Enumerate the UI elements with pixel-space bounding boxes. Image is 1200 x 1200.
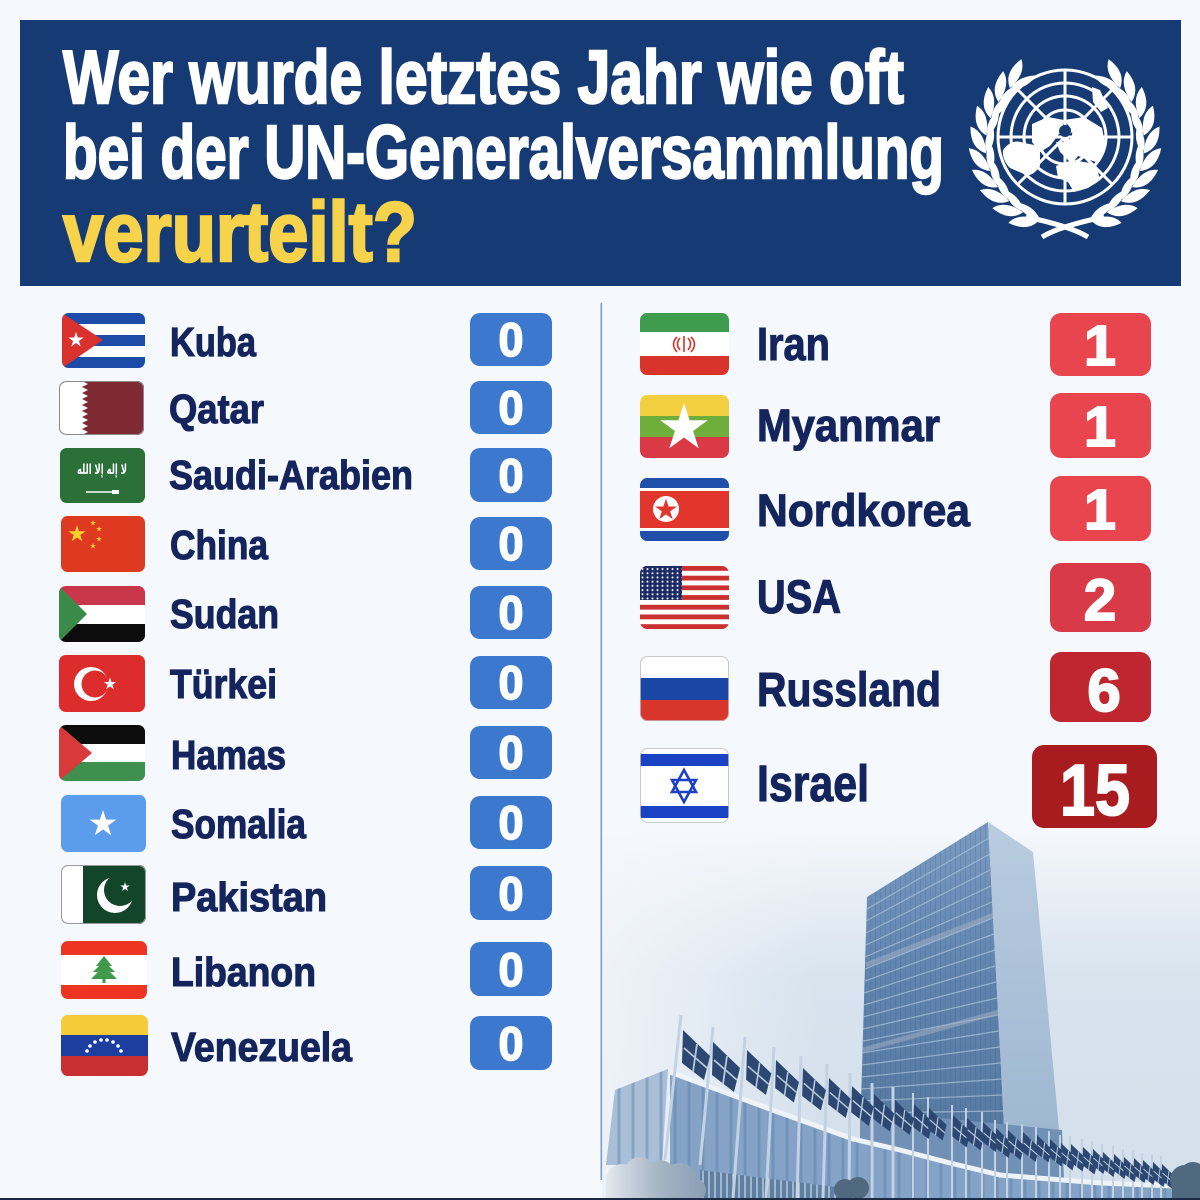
title: white question lines: Wer wurde letztes Jahr wie oft (63, 35, 904, 119)
flag: Libanon (61, 941, 147, 999)
bottom edge strip (0, 1198, 1200, 1200)
flag: Saudi-Arabien (60, 448, 145, 503)
row of flags (682, 1030, 1176, 1189)
count badge: 0 (498, 867, 524, 920)
row: Pakistan (61, 865, 552, 924)
icon: UN emblem (969, 59, 1161, 237)
roof edge (670, 1072, 1175, 1186)
column divider (600, 303, 602, 1180)
flag: Sudan (59, 586, 145, 642)
row: Qatar (59, 381, 552, 435)
name: Pakistan (171, 874, 327, 920)
name: Somalia (171, 801, 307, 847)
flag: Russland (640, 656, 729, 721)
title: white question lines (63, 35, 944, 194)
count badge (470, 517, 552, 570)
count badge: 1 (1084, 314, 1116, 378)
building photo backdrop (602, 822, 1200, 1200)
flag: Israel (640, 748, 729, 823)
right column: condemned states (640, 313, 1157, 831)
fence (700, 1170, 860, 1198)
name: Iran (757, 318, 830, 370)
row: Russland (640, 652, 1151, 724)
count badge (470, 381, 552, 434)
name: Israel (757, 755, 869, 812)
row: Hamas (59, 725, 552, 781)
count badge: 0 (498, 943, 524, 996)
lower glass band behind facade (860, 1110, 1064, 1180)
row: Türkei (59, 655, 552, 712)
flag: Iran (640, 313, 729, 375)
name: USA (757, 570, 841, 623)
flag: Nordkorea (640, 478, 729, 541)
flag: Somalia (61, 795, 146, 852)
name: Saudi-Arabien (169, 452, 413, 498)
count badge (470, 866, 552, 920)
count badge: 0 (498, 449, 524, 502)
count badge: 0 (498, 381, 524, 434)
row: Myanmar (640, 393, 1151, 459)
count badge (470, 942, 552, 996)
count badge (1032, 745, 1157, 831)
name: Türkei (170, 661, 277, 707)
count badge: 1 (1084, 478, 1116, 542)
row: Kuba (62, 313, 552, 368)
count badge (470, 313, 552, 366)
row: Libanon (61, 941, 552, 999)
tower: glass front (860, 822, 1005, 1145)
count badge (1050, 563, 1151, 633)
curved facade (670, 1074, 1175, 1198)
flag: Palästina (59, 725, 145, 781)
title: white question lines: bei der UN-Generalversammlung (63, 110, 944, 194)
count badge: 0 (498, 313, 524, 366)
name: Nordkorea (757, 485, 971, 536)
row: Saudi-Arabien (60, 448, 552, 503)
tower: side wall (988, 822, 1061, 1150)
count badge (1050, 393, 1151, 459)
count badge (470, 448, 552, 502)
title: yellow highlight word: verurteilt? (63, 185, 417, 279)
name: Libanon (171, 949, 316, 995)
flag: Myanmar (640, 395, 729, 458)
count badge: 0 (498, 586, 524, 639)
count badge: 1 (1084, 395, 1116, 459)
count badge (1050, 652, 1151, 724)
row: USA (640, 563, 1151, 633)
flag: USA (640, 566, 729, 629)
flag: China (61, 516, 145, 572)
count badge: 0 (498, 1017, 524, 1070)
flag: Saudi-Arabien: لا إله إلا الله (77, 462, 127, 478)
row: Israel (640, 745, 1157, 831)
count badge (1050, 476, 1151, 542)
count badge: 2 (1084, 568, 1116, 633)
count badge (470, 796, 552, 849)
flag: Venezuela (61, 1015, 148, 1076)
row: Nordkorea (640, 476, 1151, 542)
name: Hamas (171, 732, 286, 778)
count badge (470, 1016, 552, 1070)
name: Russland (757, 664, 941, 717)
name: Qatar (169, 386, 264, 432)
name: Venezuela (171, 1024, 353, 1070)
name: Sudan (170, 591, 279, 637)
count badge: 0 (498, 656, 524, 709)
count badge: 0 (498, 726, 524, 779)
row: Sudan (59, 586, 552, 642)
flag: Türkei (59, 655, 145, 712)
row: Somalia (61, 795, 552, 852)
count badge: 0 (498, 796, 524, 849)
row: Venezuela (61, 1015, 552, 1076)
count badge: 6 (1087, 657, 1121, 724)
trees (606, 1157, 1200, 1200)
name: Myanmar (757, 400, 940, 451)
flag: Kuba (62, 313, 145, 368)
general assembly left block (606, 1069, 668, 1165)
row: Iran (640, 313, 1151, 378)
count badge: 15 (1060, 751, 1130, 831)
row of flagpoles (665, 1015, 1161, 1198)
count badge (470, 586, 552, 639)
flag: Pakistan (61, 865, 146, 924)
row: China (61, 516, 552, 572)
left column: zero condemnations (59, 313, 552, 1076)
name: Kuba (170, 319, 257, 365)
flag: Qatar (59, 381, 144, 435)
count badge (1050, 313, 1151, 378)
header banner (20, 20, 1181, 286)
name: China (170, 522, 269, 568)
count badge (470, 656, 552, 709)
count badge: 0 (498, 517, 524, 570)
count badge (470, 726, 552, 779)
